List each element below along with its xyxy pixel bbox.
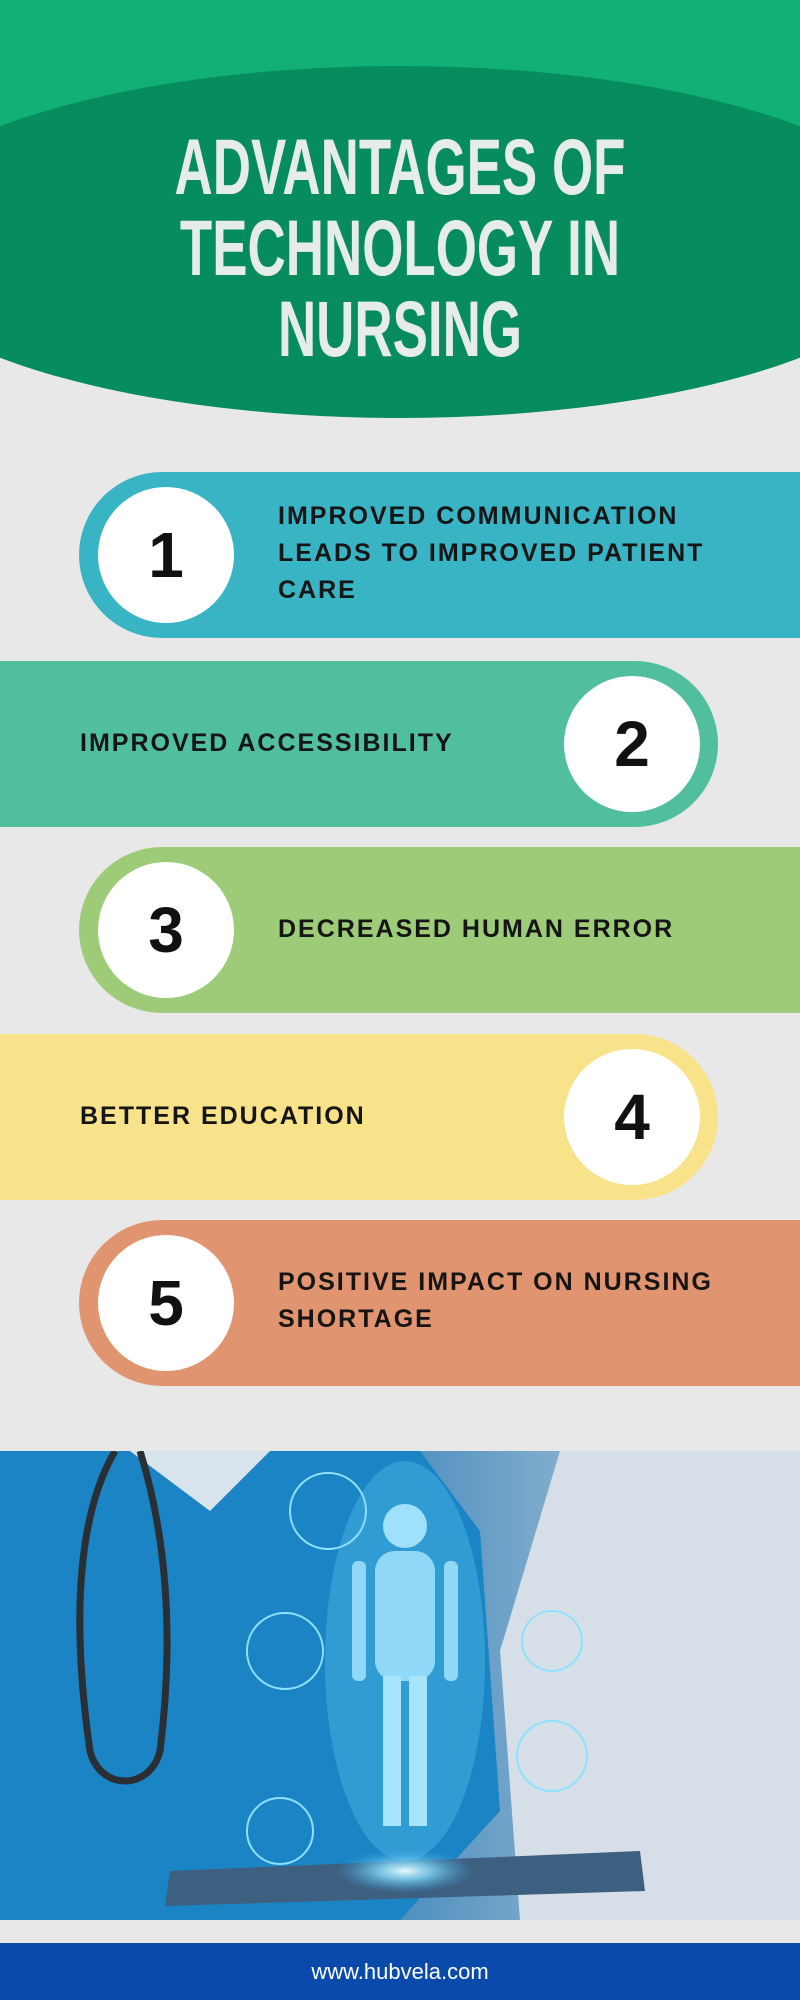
text 1: CARE: [278, 576, 357, 604]
info circles: [247, 1473, 587, 1864]
text 1: [278, 502, 704, 604]
text 4: BETTER EDUCATION: [80, 1102, 366, 1130]
number circle 5: [98, 1235, 234, 1371]
header background: [0, 0, 800, 242]
text 3: DECREASED HUMAN ERROR: [278, 915, 674, 943]
item 1: [79, 472, 800, 638]
title: [175, 122, 625, 373]
title: ADVANTAGES OF: [175, 122, 625, 211]
photo: medical hologram: [0, 1451, 800, 1920]
item 5: [79, 1220, 800, 1386]
left nurse scrubs: [0, 1451, 500, 1920]
number circle 2: [564, 676, 700, 812]
text 5: POSITIVE IMPACT ON NURSING: [278, 1268, 713, 1296]
title: TECHNOLOGY IN: [180, 203, 620, 292]
number circle 3: [98, 862, 234, 998]
stethoscope: [80, 1451, 167, 1781]
number circle 3: 3: [148, 894, 184, 966]
footer: www.hubvela.com: [311, 1959, 489, 1984]
number circle 4: [564, 1049, 700, 1185]
item 3: [79, 847, 800, 1013]
text 5: SHORTAGE: [278, 1305, 434, 1333]
tablet: [165, 1851, 645, 1906]
number circle 4: 4: [614, 1081, 650, 1153]
number circle 1: [98, 487, 234, 623]
text 5: [278, 1268, 713, 1333]
footer: [0, 1943, 800, 2000]
hologram figure: [325, 1461, 485, 1861]
number circle 1: 1: [148, 519, 184, 591]
text 1: IMPROVED COMMUNICATION: [278, 502, 678, 530]
text 2: IMPROVED ACCESSIBILITY: [80, 729, 454, 757]
number circle 2: 2: [614, 708, 650, 780]
text 1: LEADS TO IMPROVED PATIENT: [278, 539, 704, 567]
right doctor coat: [500, 1451, 800, 1920]
item 2: [0, 661, 718, 827]
title: NURSING: [278, 284, 522, 373]
item 4: [0, 1034, 718, 1200]
number circle 5: 5: [148, 1267, 184, 1339]
header ellipse: [0, 66, 800, 418]
